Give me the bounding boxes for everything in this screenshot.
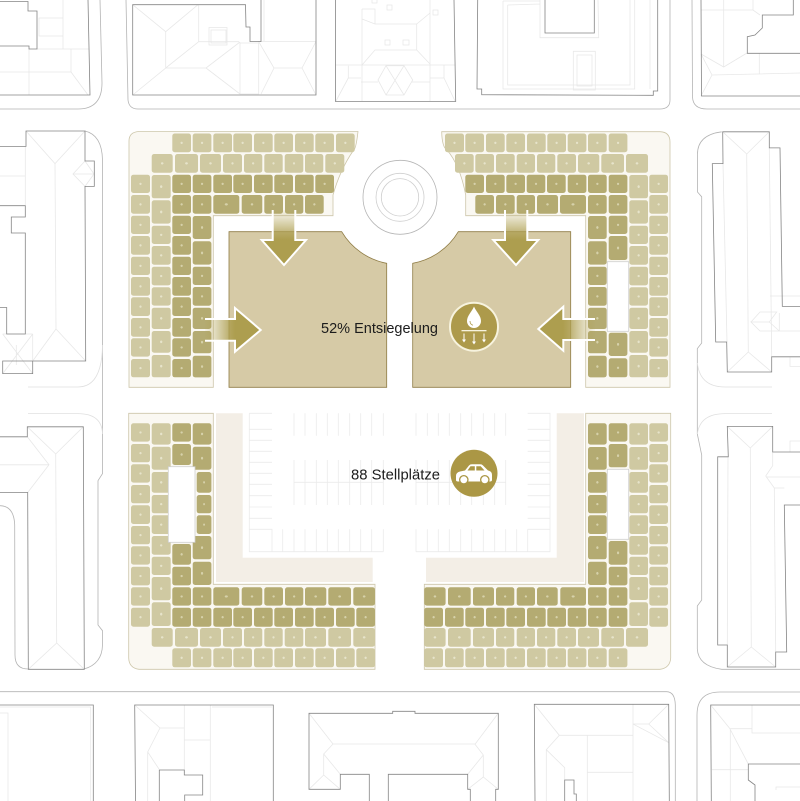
arrow: right, pointing left	[538, 307, 595, 351]
plots: bottom right block	[424, 423, 668, 667]
context: buildings right	[712, 132, 800, 667]
tree pit: bottom left	[168, 467, 195, 542]
arrow: top right, pointing down	[493, 210, 538, 265]
unsealed areas	[229, 232, 571, 387]
tree pit: top right	[607, 262, 629, 331]
parking grid	[249, 413, 550, 552]
arrow: left, pointing right	[205, 308, 261, 352]
label: 88 Stellplätze: 88 Stellplätze	[351, 466, 440, 484]
tree pit: bottom right	[607, 469, 629, 539]
green area outlines	[129, 132, 671, 669]
context: buildings left	[0, 131, 94, 669]
context: buildings top	[0, 0, 800, 102]
context: buildings bottom	[0, 704, 800, 801]
label: 52% Entsiegelung: 52% Entsiegelung	[321, 320, 438, 337]
icon: car	[450, 450, 498, 497]
plots: top left block	[131, 134, 355, 377]
plots: bottom left block	[131, 423, 375, 667]
icon: water seepage	[450, 303, 498, 351]
arrow: top left, pointing down	[262, 210, 306, 265]
roundabout	[363, 160, 437, 234]
pedestrian paths	[216, 413, 584, 582]
plots: top right block	[445, 134, 668, 377]
